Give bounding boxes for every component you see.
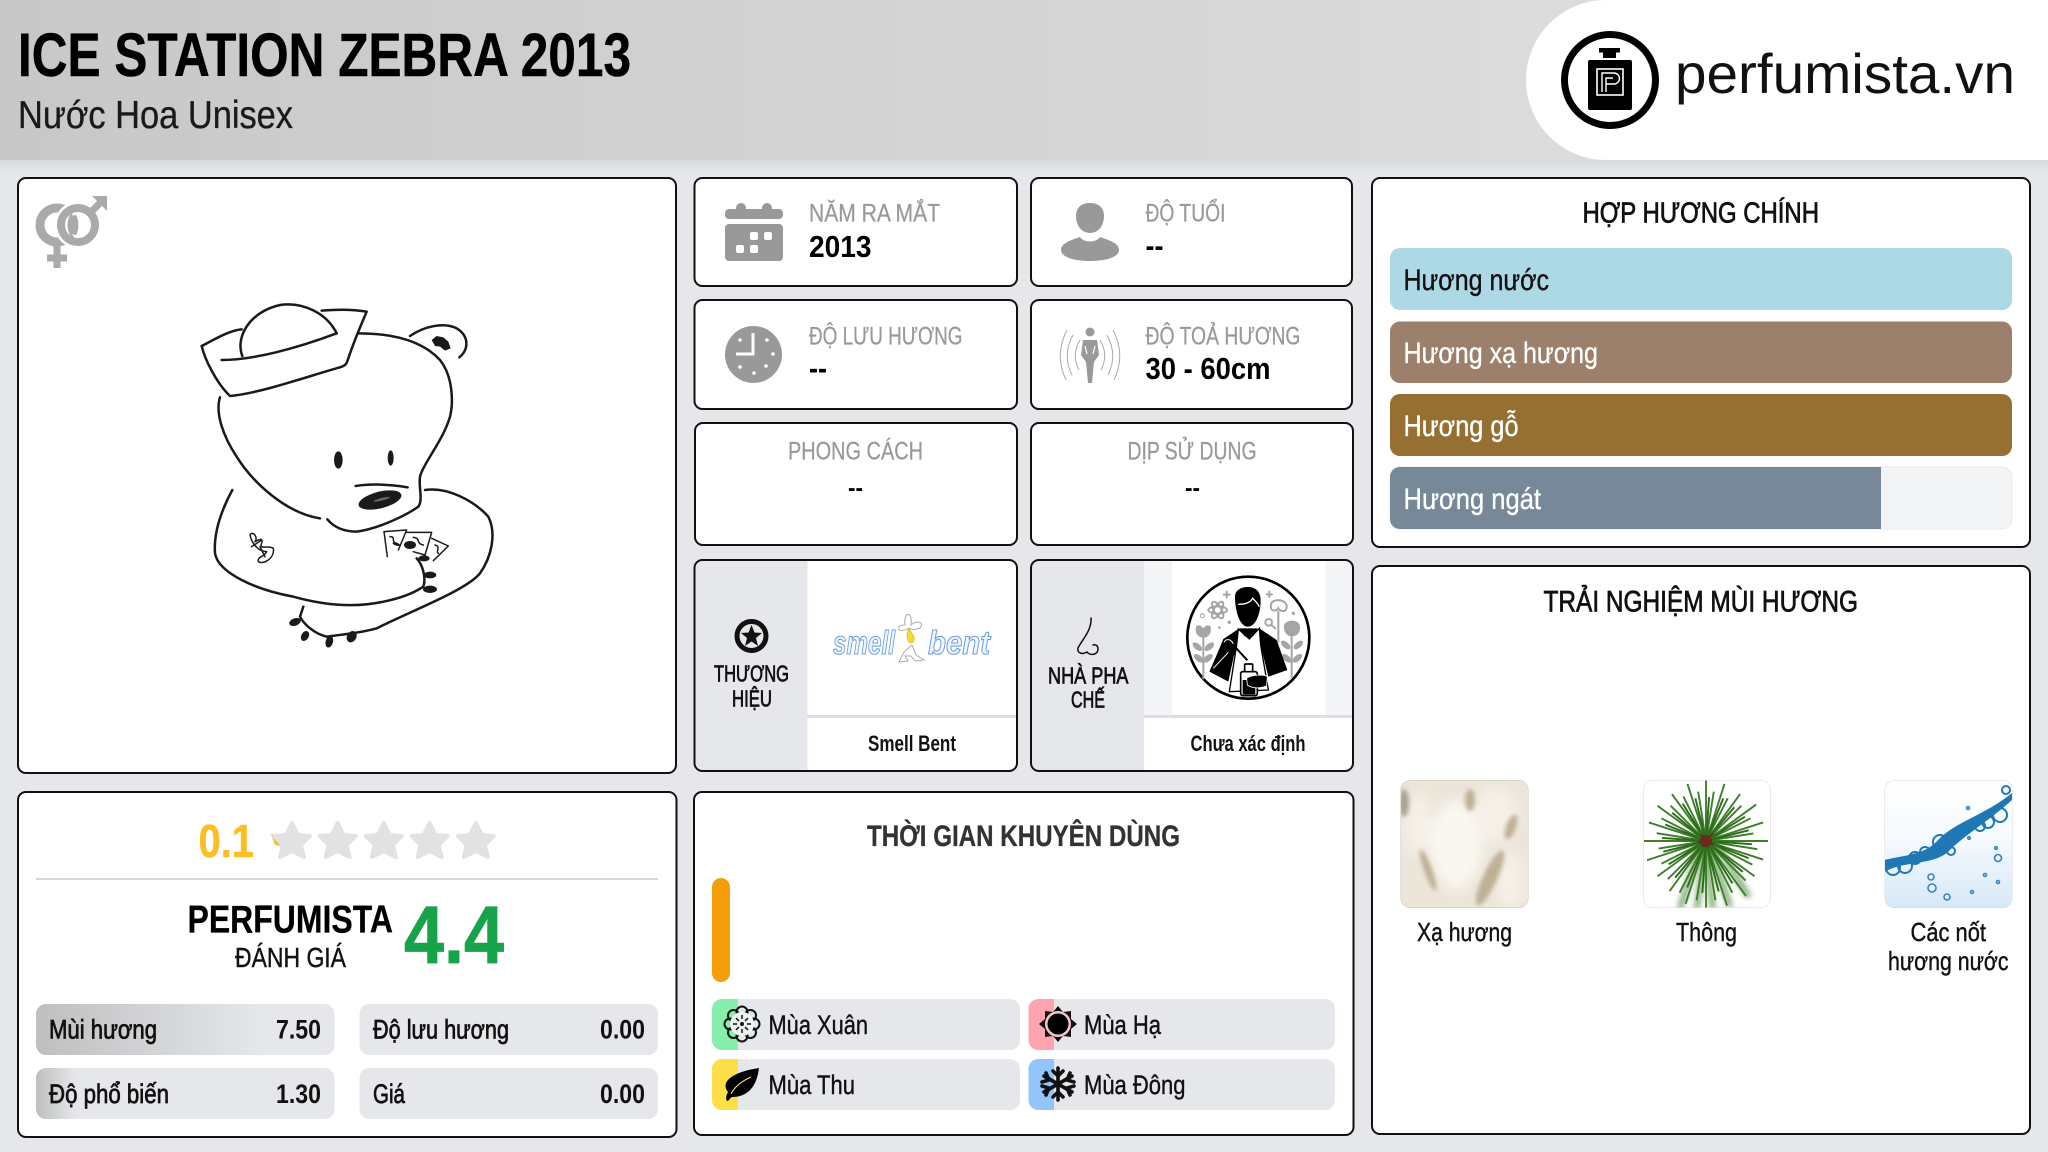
score: longevity: 0.00 <box>600 1014 645 1044</box>
panel: brand <box>694 560 1017 771</box>
season: spring: Mùa Xuân <box>768 1010 868 1040</box>
icon: unisex gender symbol <box>40 196 107 268</box>
photo: musk <box>1399 780 1529 908</box>
grey botanical motifs <box>1203 592 1292 678</box>
label: musk: Xạ hương <box>1417 917 1512 947</box>
panel: longevity <box>694 300 1017 409</box>
figure <box>1235 587 1261 627</box>
label: pine: Thông <box>1676 917 1737 947</box>
label: ĐỘ TUỔI <box>1146 198 1226 228</box>
score: longevity: Độ lưu hương <box>373 1014 509 1044</box>
icon: sun <box>1039 1006 1077 1042</box>
panel: user rating and scores <box>18 792 676 1137</box>
icon: clock <box>725 326 782 383</box>
sidebar label: THƯƠNG <box>714 660 789 686</box>
icon: calendar <box>725 203 783 261</box>
score: scent: 7.50 <box>276 1014 321 1044</box>
sidebar label <box>714 660 789 712</box>
label: aquatic notes <box>1888 917 2008 976</box>
season: winter <box>1028 1059 1335 1110</box>
sidebar label: NHÀ PHA <box>1048 662 1129 688</box>
season: summer <box>1028 999 1335 1050</box>
score: price: Giá <box>373 1079 406 1109</box>
panel: occasion <box>1031 423 1353 545</box>
panel: perfumer <box>1031 560 1353 771</box>
score: popularity: 1.30 <box>276 1079 321 1109</box>
accord bar: woody <box>1390 394 2012 456</box>
label: PHONG CÁCH <box>788 436 923 466</box>
value: -- <box>1185 475 1200 502</box>
accord bar: musk <box>1390 322 2012 383</box>
score: longevity <box>360 1004 658 1055</box>
photo: pine <box>1643 779 1771 909</box>
score: scent <box>36 1004 334 1055</box>
icon: flower <box>724 1006 760 1042</box>
score: price: 0.00 <box>600 1079 645 1109</box>
subtitle: Nước Hoa Unisex <box>18 94 293 137</box>
header band <box>0 0 2048 172</box>
icon: person <box>1061 203 1119 261</box>
score: popularity: Độ phổ biến <box>49 1079 169 1109</box>
score: scent: Mùi hương <box>49 1014 157 1044</box>
label: NĂM RA MẮT <box>809 198 940 228</box>
value: -- <box>1146 228 1164 263</box>
perfumista score: 4.4 <box>404 890 504 981</box>
icon: star badge <box>737 622 766 650</box>
illustration: perfumer <box>1187 577 1309 699</box>
panel: sillage <box>1031 300 1352 409</box>
panel: age <box>1031 178 1352 286</box>
panel: main accords <box>1372 178 2030 547</box>
accord bar: aromatic <box>1390 467 2012 529</box>
star rating <box>274 823 494 857</box>
accord bar: woody: Hương gỗ <box>1404 410 1518 443</box>
user rating number: 0.1 <box>198 815 254 867</box>
season: autumn: Mùa Thu <box>768 1070 855 1100</box>
accord bar: water: Hương nước <box>1404 264 1549 297</box>
value: 2013 <box>809 229 872 264</box>
value: -- <box>809 350 827 386</box>
logo wordmark: perfumista.vn <box>1675 42 2015 105</box>
brand logo: smell bent <box>833 614 992 662</box>
label: ĐỘ LƯU HƯƠNG <box>809 322 962 350</box>
sidebar label <box>1048 662 1129 712</box>
illustration: sailor bear <box>202 304 492 648</box>
panel: style <box>695 423 1017 545</box>
heading: THỜI GIAN KHUYÊN DÙNG <box>867 819 1180 853</box>
season: spring <box>712 999 1020 1050</box>
value: 30 - 60cm <box>1146 351 1270 386</box>
brand name: Smell Bent <box>868 731 957 756</box>
icon: nose <box>1078 618 1098 654</box>
photo: water <box>1884 780 2012 908</box>
value: -- <box>848 475 863 502</box>
label: DỊP SỬ DỤNG <box>1128 436 1256 466</box>
brand logo: smell bent: smell <box>833 624 896 661</box>
panel: recommended time <box>694 792 1354 1135</box>
panel: scent experience <box>1372 566 2030 1134</box>
sidebar label: CHẾ <box>1071 686 1105 712</box>
heading: HỢP HƯƠNG CHÍNH <box>1582 196 1819 230</box>
accord bar: aromatic: Hương ngát <box>1404 483 1542 516</box>
title: ICE STATION ZEBRA 2013 <box>18 21 631 89</box>
season: summer: Mùa Hạ <box>1084 1010 1162 1040</box>
rating sublabel: ĐÁNH GIÁ <box>235 942 346 973</box>
brand logo: smell bent: bent <box>928 624 992 661</box>
panel: perfume image <box>18 178 676 773</box>
panel: release year <box>694 178 1017 286</box>
season: winter: Mùa Đông <box>1084 1070 1186 1100</box>
icon: snowflake <box>1042 1068 1074 1100</box>
label: aquatic notes: hương nước <box>1888 946 2008 976</box>
sidebar label: HIỆU <box>732 686 772 712</box>
icon: partial gold star <box>271 834 281 846</box>
score: price <box>360 1068 658 1119</box>
season: autumn <box>712 1059 1020 1110</box>
perfumer name: Chưa xác định <box>1190 731 1306 756</box>
icon: person radiating scent <box>1060 328 1120 383</box>
icon: leaf <box>726 1068 759 1101</box>
label: aquatic notes: Các nốt <box>1910 917 1987 947</box>
accord bar: water <box>1390 248 2012 310</box>
score: popularity <box>36 1068 334 1119</box>
label: ĐỘ TOẢ HƯƠNG <box>1146 320 1300 350</box>
heading: TRẢI NGHIỆM MÙI HƯƠNG <box>1544 584 1858 618</box>
perfumista label: PERFUMISTA <box>188 898 393 942</box>
accord bar: musk: Hương xạ hương <box>1404 337 1598 370</box>
icon: perfume bottle logo <box>1564 34 1656 126</box>
logo block <box>1526 0 2048 160</box>
time bar <box>712 878 730 982</box>
